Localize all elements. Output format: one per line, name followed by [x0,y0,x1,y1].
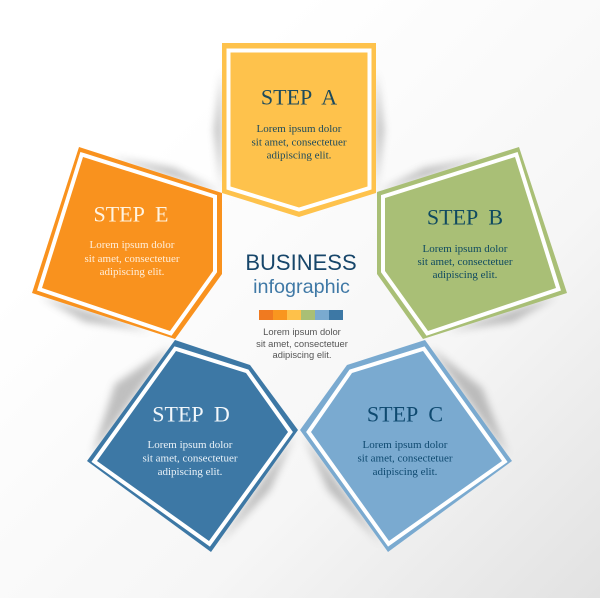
shape: step E pentagon [32,147,222,339]
shape: step A pentagon [222,43,376,217]
panel: step B [377,147,567,339]
soft shadows [40,70,558,545]
text: center body: sit amet, consectetuer [256,338,348,349]
panel: step C [300,340,512,552]
shape: step B pentagon [377,147,567,339]
text: step B body: Lorem ipsum dolor [423,243,508,255]
text: center body: Lorem ipsum dolor [263,326,341,337]
text: step C body: Lorem ipsum dolor [363,439,448,451]
text: step A body: adipiscing elit. [267,150,332,162]
center title [245,250,357,298]
text: step D body: adipiscing elit. [158,466,223,478]
heading: step E: STEP E [94,202,168,226]
panel: step D [87,340,298,552]
text: step D body: Lorem ipsum dolor [148,439,233,451]
title: business: BUSINESS [245,250,357,275]
heading: step D: STEP D [152,402,230,426]
text: step E body: sit amet, consectetuer [84,253,180,265]
text: step C body: adipiscing elit. [373,466,438,478]
text: center body: adipiscing elit. [273,349,331,360]
subtitle: infographic: infographic [253,276,350,298]
text: step A body: sit amet, consectetuer [252,136,347,148]
text: step B body: sit amet, consectetuer [418,256,513,268]
panel: step A [222,43,376,217]
text: step C body: sit amet, consectetuer [358,452,453,464]
shape: step D pentagon [87,340,298,552]
text: step D body: sit amet, consectetuer [142,452,238,464]
text: step E body: adipiscing elit. [100,266,165,278]
text: step E body: Lorem ipsum dolor [90,239,175,251]
shape: step C pentagon [300,340,512,552]
panel: step E [32,147,222,339]
text: step B body: adipiscing elit. [433,269,498,281]
heading: step A: STEP A [261,84,337,110]
colour bar [259,310,343,320]
heading: step C: STEP C [367,402,443,426]
heading: step B: STEP B [427,204,503,230]
text: step A body: Lorem ipsum dolor [257,123,342,135]
